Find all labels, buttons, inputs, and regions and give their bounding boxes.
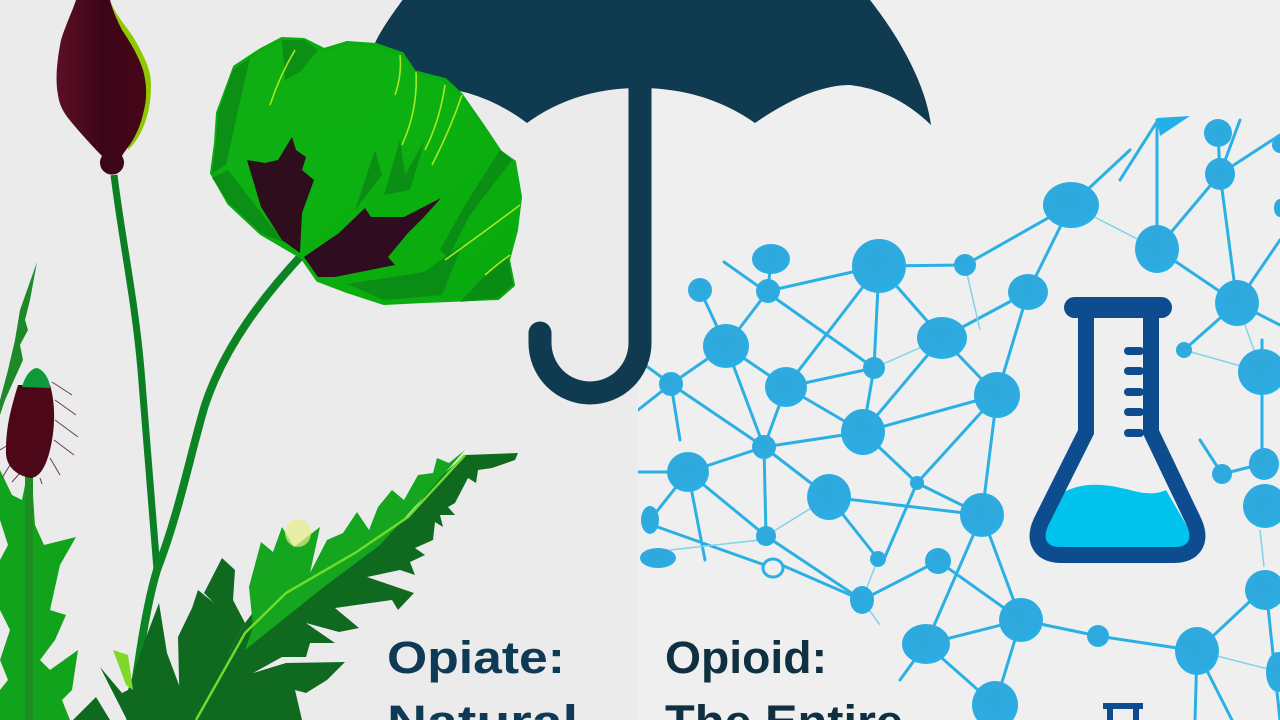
flask outline xyxy=(1038,310,1197,555)
flag shape xyxy=(1157,116,1190,136)
flask icon xyxy=(1038,297,1197,555)
spiky stalk leaf far left xyxy=(0,262,37,415)
petal highlights xyxy=(270,50,520,275)
small bud cap xyxy=(22,368,50,388)
bud stem xyxy=(114,175,157,570)
text: opiate xyxy=(387,632,578,720)
flask liquid xyxy=(1040,485,1195,552)
dark blotch left xyxy=(247,137,314,253)
yellow glow xyxy=(285,519,311,547)
ring node xyxy=(763,559,783,577)
flask rim xyxy=(1064,297,1172,318)
text: opiate: Opiate: xyxy=(387,632,565,683)
fern spine xyxy=(196,455,465,720)
petal shading xyxy=(212,40,513,302)
flower stem xyxy=(130,257,300,720)
bud sepal xyxy=(110,0,151,150)
bud capsule xyxy=(57,0,146,175)
text: opioid xyxy=(665,632,903,720)
umbrella shaft and hook xyxy=(540,80,640,393)
small bud hairs xyxy=(0,382,78,484)
small bud on left xyxy=(0,368,78,720)
bright left fern xyxy=(0,470,78,720)
petals xyxy=(212,39,520,303)
small bud stem xyxy=(25,477,33,720)
small bud body xyxy=(6,385,54,478)
poppy flower xyxy=(130,39,520,720)
dark fern leaves xyxy=(73,450,518,720)
flask ticks xyxy=(1124,347,1144,437)
small flask icon at bottom xyxy=(1103,706,1143,720)
fern far left leaflets xyxy=(73,603,182,720)
light leaf xyxy=(113,650,133,690)
dark blotch right xyxy=(304,198,441,277)
umbrella icon xyxy=(375,0,931,393)
tall bud with stem xyxy=(57,0,157,570)
fern left leaflet xyxy=(178,558,245,720)
network of molecules xyxy=(638,116,1280,720)
fern lower side xyxy=(182,453,518,720)
text: opioid: Opioid: xyxy=(665,632,827,683)
fern upper green leaflets xyxy=(245,450,465,650)
nodes xyxy=(640,119,1280,720)
umbrella canopy xyxy=(375,0,931,125)
